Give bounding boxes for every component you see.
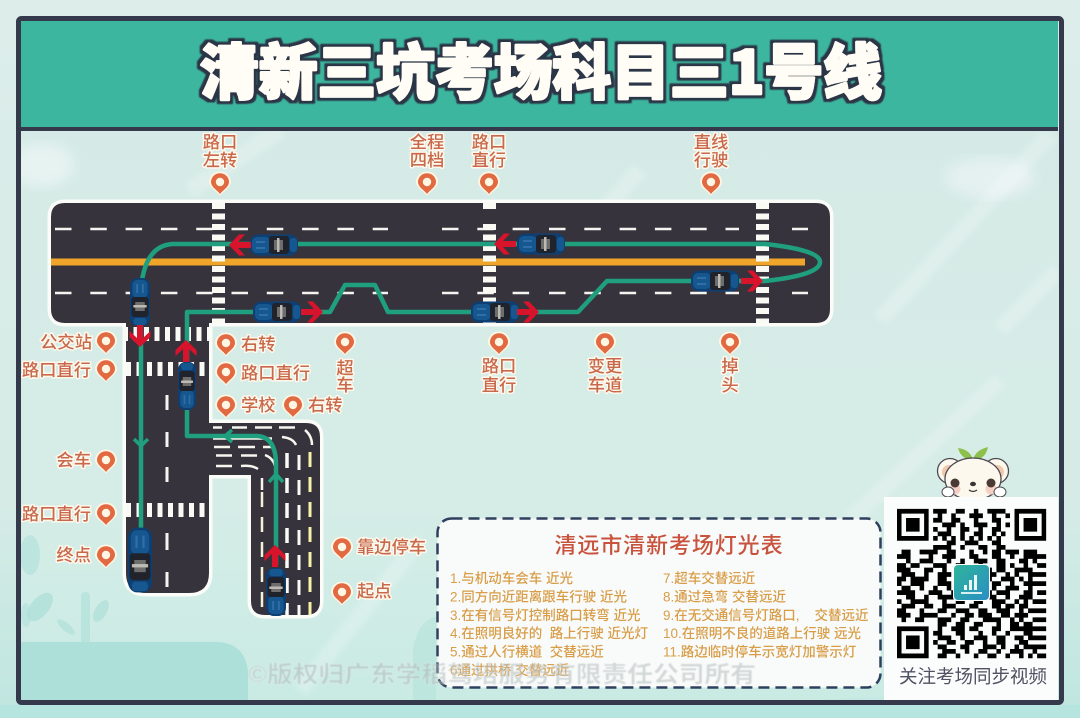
label: 变更车道: [588, 332, 622, 395]
lane dashes: [55, 229, 808, 587]
icon: QR logo: [953, 564, 990, 601]
label: 路口左转: [203, 132, 237, 196]
label: 终点: [56, 544, 117, 568]
QR caption: 关注考场同步视频: [899, 666, 1047, 687]
label: 路口直行 right: [215, 362, 310, 386]
label: 路口直行 left upper: [22, 358, 117, 382]
label: 路口直行 top: 路口: [472, 132, 506, 152]
left column: 2.同方向近距离跟车行驶 近光: [450, 588, 628, 604]
label: 超车: 超: [336, 358, 354, 378]
label: 路口左转: 左转: [203, 150, 237, 170]
crosswalks: [123, 203, 762, 510]
label: 超车: [334, 332, 356, 395]
title banner: [21, 21, 1058, 131]
label: 全程四档: 全程: [410, 132, 444, 152]
left column: 5.通过人行横道 交替远近: [450, 644, 604, 660]
label: 路口直行 top: [472, 132, 506, 196]
icon: bear mascot: [938, 447, 1008, 500]
label: 掉头: 掉: [721, 356, 739, 376]
QR panel: [884, 497, 1058, 700]
title: 清新三坑考场科目三1号线: [200, 25, 882, 112]
right column: [663, 570, 869, 660]
QR code: [897, 511, 1046, 656]
red arrows: [130, 234, 763, 567]
label: 路口直行 left lower: [22, 502, 117, 526]
right column: 7.超车交替远近: [663, 570, 756, 586]
label: 变更车道: 变更: [588, 356, 622, 376]
label: 路口直行 bottom: [482, 332, 516, 395]
label: 路口直行 top: 直行: [472, 150, 506, 170]
right column: 11.路边临时停车示宽灯加警示灯: [663, 644, 857, 660]
plants decoration: [20, 535, 436, 700]
label: 掉头: 头: [721, 375, 739, 395]
cars: [128, 234, 739, 616]
label: 会车: 会车: [56, 450, 91, 470]
label: 右转 second: 右转: [308, 395, 343, 415]
label: 靠边停车: [331, 536, 426, 560]
panel heading: 清远市清新考场灯光表: [554, 533, 784, 558]
label: 靠边停车: 靠边停车: [357, 537, 426, 557]
left column: [450, 570, 649, 678]
left column: 3.在有信号灯控制路口转弯 近光: [450, 607, 641, 623]
label: 终点: 终点: [56, 545, 91, 565]
label: 路口左转: 路口: [203, 132, 237, 152]
faint watermark streaks: [190, 130, 1058, 690]
label: 全程四档: 四档: [410, 150, 444, 170]
label: 超车: 车: [336, 375, 354, 395]
road map: [51, 203, 830, 616]
label: 学校: [215, 394, 276, 418]
label: 学校: 学校: [241, 395, 276, 415]
label: 路口直行 bottom: 路口: [482, 356, 516, 376]
left column: 6通过拱桥 交替远近: [450, 662, 570, 678]
label: 右转 second: [282, 394, 343, 418]
label: 会车: [56, 450, 117, 474]
label: 掉头: [719, 332, 741, 395]
road surface: [51, 203, 830, 615]
label: 起点: 起点: [357, 581, 392, 601]
right column: 9.在无交通信号灯路口, 交替远近: [663, 607, 869, 623]
label: 变更车道: 车道: [588, 375, 622, 395]
label: 全程四档: [410, 132, 444, 196]
label: 公交站: 公交站: [40, 332, 92, 352]
location labels: [22, 132, 741, 606]
label: 公交站: [40, 330, 117, 354]
left column: 1.与机动车会车 近光: [450, 570, 574, 586]
watermark: ©版权归广东学稻驾培服务有限责任公司所有: [248, 661, 756, 687]
yellow centre line: [51, 258, 805, 266]
right column: 10.在照明不良的道路上行驶 远光: [663, 625, 862, 641]
label: 路口直行 left lower: 路口直行: [22, 504, 91, 524]
left column: 4.在照明良好的 路上行驶 近光灯: [450, 625, 649, 641]
right column: 8.通过急弯 交替远近: [663, 588, 787, 604]
label: 路口直行 right: 路口直行: [241, 363, 310, 383]
label: 右转: 右转: [241, 334, 276, 354]
label: 路口直行 left upper: 路口直行: [22, 360, 91, 380]
lighting table panel: [438, 518, 880, 688]
label: 起点: [331, 581, 392, 606]
label: 直线行驶: 直线: [694, 132, 728, 152]
label: 路口直行 bottom: 直行: [482, 375, 516, 395]
label: 右转: [215, 332, 276, 356]
label: 直线行驶: 行驶: [694, 150, 728, 170]
junction markings: [213, 428, 312, 490]
label: 直线行驶: [694, 132, 728, 196]
green route: [134, 244, 820, 565]
